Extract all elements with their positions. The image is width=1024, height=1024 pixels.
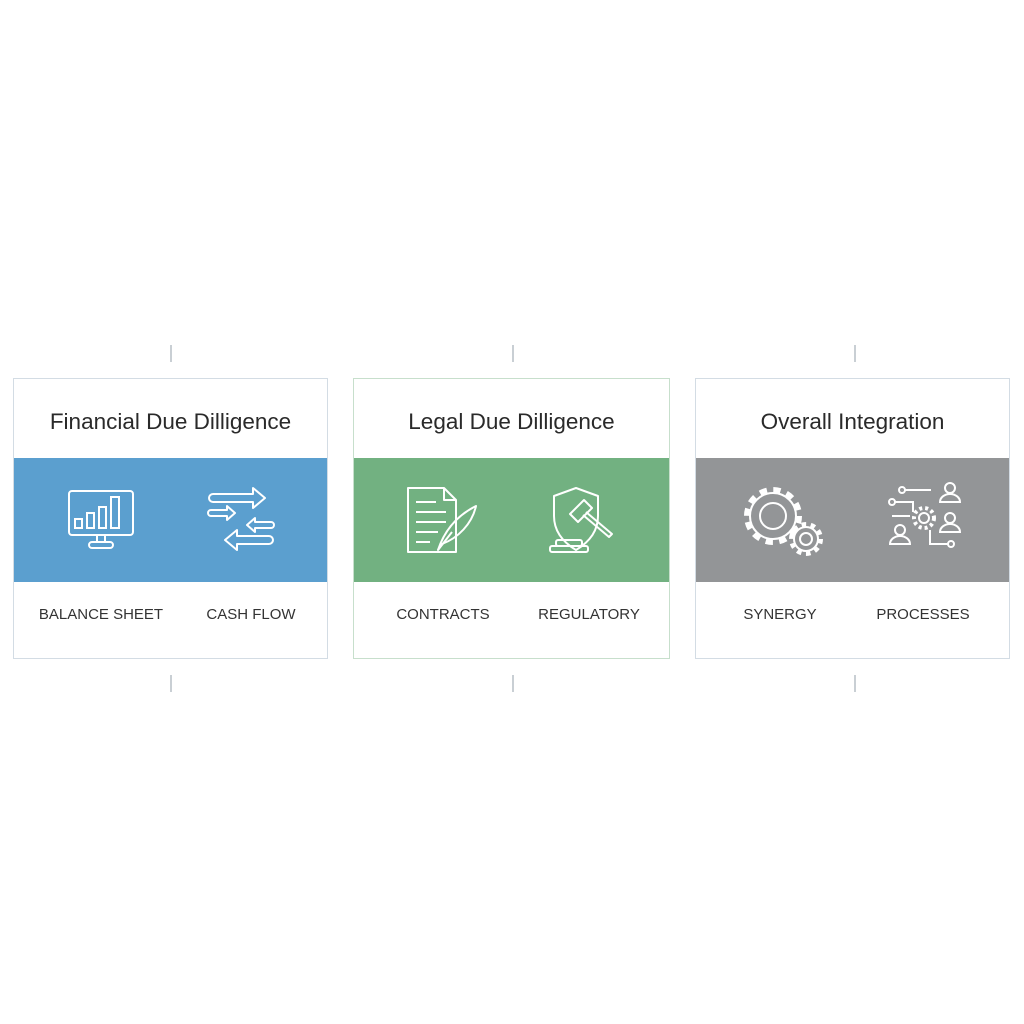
icon: monitor bar chart	[68, 490, 134, 549]
label: synergy: SYNERGY	[743, 606, 817, 623]
heading: legal: Legal Due Dilligence	[408, 409, 615, 434]
icon: gears	[744, 487, 823, 556]
panel: integration	[695, 378, 1010, 659]
label: processes: PROCESSES	[876, 606, 970, 623]
icon: cash flow arrows	[207, 487, 275, 551]
band: financial icons	[14, 458, 327, 582]
panel: financial	[13, 378, 328, 659]
label: contracts: CONTRACTS	[396, 606, 490, 623]
label: cash flow: CASH FLOW	[206, 606, 296, 623]
band: legal icons	[354, 458, 669, 582]
label: regulatory: REGULATORY	[538, 606, 640, 623]
icon: process network	[888, 482, 961, 548]
icon: contract with quill	[407, 487, 477, 553]
panel: legal	[353, 378, 670, 659]
band: integration icons	[696, 458, 1009, 582]
heading: financial: Financial Due Dilligence	[50, 409, 291, 434]
icon: shield with gavel	[549, 487, 613, 553]
label: balance sheet: BALANCE SHEET	[39, 606, 163, 623]
heading: integration: Overall Integration	[761, 409, 944, 434]
